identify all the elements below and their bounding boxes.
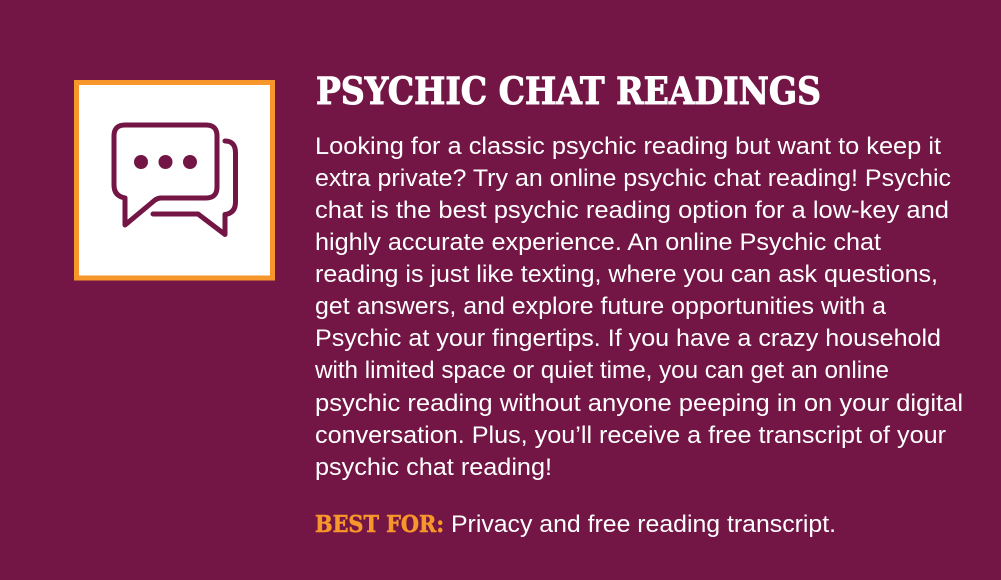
title: PSYCHIC CHAT READINGS (316, 69, 821, 113)
body text: reading is just like texting, where you can ask questions, (315, 261, 938, 288)
body text: highly accurate experience. An online Psychic chat (315, 229, 881, 256)
icon: rear speech bubble (153, 141, 236, 234)
icon: typing dots (134, 155, 197, 169)
body text: psychic chat reading! (315, 454, 552, 481)
body text: conversation. Plus, you’ll receive a free transcript of your (315, 422, 946, 449)
body text: extra private? Try an online psychic chat reading! Psychic (315, 165, 951, 192)
icon: front speech bubble (114, 125, 217, 225)
body text (314, 133, 963, 481)
icon: chat bubbles in framed square (76, 82, 272, 278)
body text: with limited space or quiet time, you can get an online (314, 357, 889, 384)
body text: Psychic at your fingertips. If you have a crazy household (315, 325, 941, 352)
body text: get answers, and explore future opportunities with a (315, 293, 887, 320)
best for line: Privacy and free reading transcript. (451, 511, 836, 538)
best for line: BEST FOR: (315, 511, 444, 538)
body text: chat is the best psychic reading option for a low-key and (315, 197, 949, 224)
body text: Looking for a classic psychic reading but want to keep it (315, 133, 941, 160)
body text: psychic reading without anyone peeping in on your digital (315, 390, 963, 417)
